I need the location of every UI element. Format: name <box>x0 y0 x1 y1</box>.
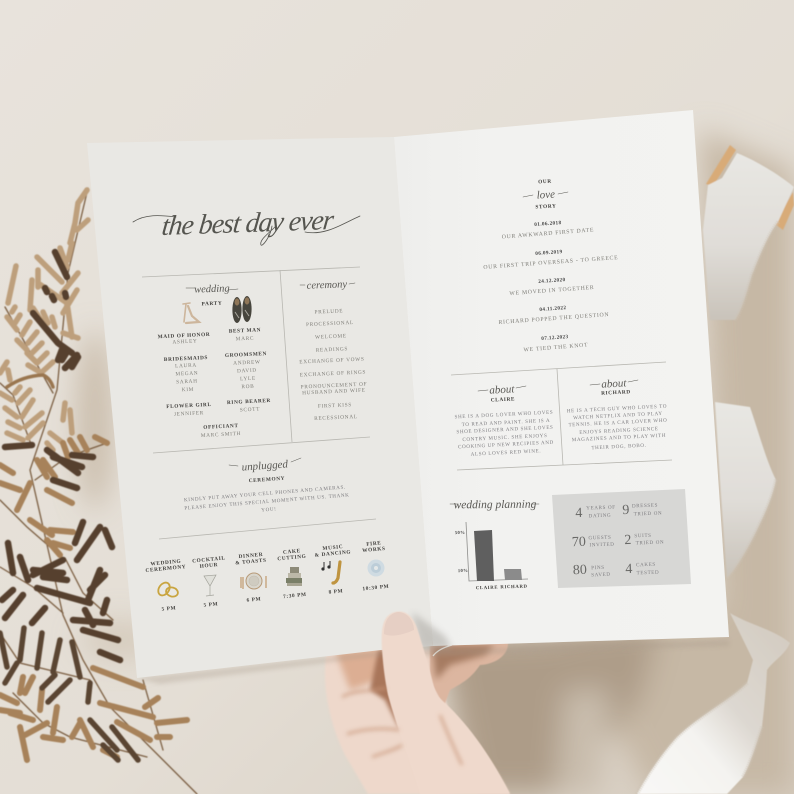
hand: thumb over the paper <box>342 612 510 794</box>
timeline: music and dancing: & DANCING <box>314 549 351 559</box>
timeline: wedding ceremony: CERERMONY <box>145 564 187 574</box>
stats panel <box>552 489 691 588</box>
icon: cake <box>286 567 302 586</box>
icon: men's shoes <box>232 296 252 323</box>
claire bio <box>454 410 554 458</box>
wedding party names: MARC <box>236 336 254 342</box>
stat: pins saved <box>573 563 611 578</box>
crevice beside thumb <box>370 650 400 730</box>
chart labels: CLAIRE <box>476 586 498 591</box>
ceremony order list: EXCHANGE OF VOWS <box>299 357 365 365</box>
timeline: wedding ceremony <box>145 559 187 613</box>
wedding party names: RING BEARER <box>227 398 271 406</box>
love story timeline: 06.09.2019 <box>535 249 563 257</box>
timeline: cocktail hour: 5 PM <box>203 601 219 609</box>
bar chart <box>455 522 528 591</box>
stat: dresses tried on: TRIED ON <box>634 511 662 517</box>
unplugged note: YOU! <box>261 506 277 514</box>
hand: palm and fingers behind the paper <box>325 642 510 794</box>
love story timeline: WE TIED THE KNOT <box>523 342 589 354</box>
love story timeline: 01.06.2018 <box>534 220 562 228</box>
wedding party names: JENNIFER <box>174 410 204 418</box>
timeline: cake cutting: CAKE <box>283 548 301 556</box>
timeline: cocktail hour: HOUR <box>199 562 218 570</box>
timeline: wedding ceremony: 5 PM <box>161 605 177 613</box>
wedding party names: ANDREW <box>233 359 261 367</box>
stat: guests invited: INVITED <box>589 542 615 548</box>
timeline: dinner and toasts: & TOASTS <box>235 558 267 566</box>
timeline: cake cutting: CUTTING <box>277 554 307 562</box>
ceremony order list: RECESSIONAL <box>314 414 358 422</box>
ceremony order list: EXCHANGE OF RINGS <box>300 369 366 379</box>
wedding party names: ASHLEY <box>172 338 198 346</box>
timeline: fire works: WORKS <box>362 546 386 554</box>
heading: about richard: RICHARD <box>601 389 631 397</box>
stat: guests invited: GUESTS <box>588 535 612 541</box>
heading: wedding planning: wedding planning <box>454 499 537 511</box>
timeline: dinner and toasts: 6 PM <box>246 596 262 604</box>
claire bio: ALSO LOVES RED WINE. <box>471 448 541 458</box>
section: wedding planning <box>450 489 691 591</box>
wedding party names: SCOTT <box>240 407 260 413</box>
thumb shadow <box>412 612 452 650</box>
ceremony order list <box>299 308 367 422</box>
heading: about richard <box>590 377 638 397</box>
section: day timeline <box>145 540 390 613</box>
curved tan stalk <box>7 375 53 387</box>
stat: cakes tested <box>625 562 659 577</box>
pale tan leaflets <box>0 190 88 450</box>
unplugged note: KINDLY PUT AWAY YOUR CELL PHONES AND CAMERAS. <box>184 485 346 504</box>
icon: sandal <box>183 303 199 323</box>
love story timeline: OUR FIRST TRIP OVERSEAS - TO GREECE <box>483 255 619 271</box>
heading: about claire: about <box>489 383 516 397</box>
chart labels: RICHARD <box>500 585 528 590</box>
chart axes <box>466 522 528 581</box>
timeline: cake cutting: 7:30 PM <box>283 592 307 600</box>
wedding party names: SARAH <box>176 379 198 385</box>
about section rules <box>451 362 672 470</box>
wedding party names: MARC SMITH <box>201 431 241 439</box>
dark brown leaflets <box>2 252 120 660</box>
ceremony order list: PRELUDE <box>314 308 343 316</box>
stat: years of dating: 4 <box>575 506 583 521</box>
section: unplugged ceremony <box>184 458 350 514</box>
stat: cakes tested: 4 <box>625 562 633 577</box>
mid brown leaflets <box>0 437 187 760</box>
finger shading <box>432 645 495 680</box>
stat: years of dating <box>575 504 616 521</box>
timeline: music and dancing: MUSIC <box>322 544 344 552</box>
chart labels: 10% <box>458 568 468 573</box>
claire bio: COOKING UP NEW RECIPIES AND <box>458 440 554 450</box>
heading: our love story: love <box>536 189 555 201</box>
stat: pins saved: 80 <box>573 563 587 578</box>
stats panel background <box>552 489 691 588</box>
stat: suits tried on <box>624 533 664 548</box>
left page <box>87 137 433 678</box>
timeline: cocktail hour: COCKTAIL <box>192 555 226 565</box>
claire bio: SHOE DESIGNER AND SHE LOVES <box>456 425 554 435</box>
about claire <box>454 383 554 458</box>
section: wedding party <box>158 283 271 439</box>
love story timeline: RICHARD POPPED THE QUESTION <box>498 312 610 326</box>
love story timeline: 07.12.2023 <box>541 334 569 342</box>
heading: about richard: about <box>601 377 628 391</box>
stat: years of dating: YEARS OF <box>586 504 616 512</box>
wedding party names: DAVID <box>237 368 257 374</box>
fern: dried branches <box>0 188 197 794</box>
wedding party names: KIM <box>182 387 194 393</box>
timeline: dinner and toasts: DINNER <box>238 552 263 560</box>
stat: suits tried on: TRIED ON <box>636 540 664 546</box>
wedding party names: MEGAN <box>175 370 199 378</box>
right page paper <box>394 110 729 646</box>
fern stems <box>0 188 197 794</box>
claire bio: TO READ AND PAINT. SHE IS A <box>462 418 550 428</box>
heading: our love story: STORY <box>535 203 557 211</box>
heading: our love story <box>523 179 568 211</box>
wedding party names: GROOMSMEN <box>225 351 267 359</box>
ribbon: middle <box>715 402 776 578</box>
wedding party names: BEST MAN <box>229 327 261 335</box>
claire bio: CONTRY MUSIC. SHE ENJOYS <box>462 433 548 443</box>
wedding party names: OFFICIANT <box>203 423 239 431</box>
bar: claire <box>474 530 494 581</box>
knuckle and palm creases <box>342 688 462 765</box>
richard bio: TENNIS. HE IS A CAR LOVER WHO <box>568 418 668 428</box>
title: the best day ever: the best day ever <box>160 205 337 242</box>
richard bio: ENJOYS READING SCIENCE <box>579 426 659 436</box>
timeline: fire works: 10:30 PM <box>362 584 390 592</box>
timeline: dinner and toasts <box>235 552 267 604</box>
timeline: cocktail hour <box>192 555 226 609</box>
richard bio: HE IS A TECH GUY WHO LOVES TO <box>567 404 667 414</box>
shadow area right of the pages <box>77 130 794 794</box>
timeline: fire works: FIRE <box>366 540 382 548</box>
timeline: music and dancing: 8 PM <box>328 588 344 596</box>
bar: richard <box>504 569 522 580</box>
heading: ceremony: ceremony <box>307 279 348 292</box>
heading: unplugged ceremony: CEREMONY <box>249 476 285 484</box>
love story timeline <box>483 220 619 354</box>
stat: cakes tested: TESTED <box>637 570 659 576</box>
love story timeline: 04.11.2022 <box>539 305 567 313</box>
stat: dresses tried on: 9 <box>622 503 630 518</box>
thumb nail <box>384 612 414 636</box>
right page <box>394 110 729 646</box>
stat: dresses tried on <box>622 503 662 518</box>
ring <box>433 645 452 656</box>
icon: saxophone with notes <box>321 561 340 583</box>
stat: suits tried on: SUITS <box>634 533 652 539</box>
wedding party names: LAURA <box>175 363 197 369</box>
ceremony order list: WELCOME <box>315 333 347 341</box>
stat: guests invited: 70 <box>572 535 586 550</box>
heading: unplugged ceremony <box>229 458 301 484</box>
stat: guests invited <box>572 535 615 550</box>
wedding party names: ROB <box>241 384 255 390</box>
heading: wedding party: wedding <box>194 283 230 296</box>
unplugged note: PLEASE ENJOY THIS SPECIAL MOMENT WITH US. THANK <box>184 492 350 512</box>
love story timeline: WE MOVED IN TOGETHER <box>509 285 595 297</box>
ribbon: top <box>703 145 794 320</box>
ceremony order list: FIRST KISS <box>318 402 352 410</box>
ceremony order list: READINGS <box>316 346 348 354</box>
left page paper <box>87 137 433 678</box>
ribbon: bottom <box>637 613 790 794</box>
finger behind page <box>430 642 508 706</box>
chart labels <box>455 530 528 591</box>
index finger shading <box>335 648 382 690</box>
richard bio <box>567 404 668 451</box>
icon: gold rings <box>156 580 179 598</box>
stat: cakes tested: CAKES <box>636 562 656 568</box>
timeline: music and dancing <box>314 544 351 596</box>
icon: firework <box>368 560 384 576</box>
wedding party names: FLOWER GIRL <box>166 402 212 410</box>
chart labels: 50% <box>455 530 465 535</box>
heading: about claire: CLAIRE <box>491 396 515 404</box>
ceremony order list: PROCESSIONAL <box>306 320 354 328</box>
shadow beneath the open pages <box>137 640 729 684</box>
richard bio: THEIR DOG, BOBO. <box>591 443 647 451</box>
love story timeline: OUR AWKWARD FIRST DATE <box>502 227 594 241</box>
heading: wedding party <box>186 283 238 307</box>
heading: unplugged ceremony: unplugged <box>241 458 289 474</box>
table rules <box>142 267 376 539</box>
wedding party names: LYLE <box>240 376 256 382</box>
timeline: cake cutting <box>277 548 307 600</box>
claire bio: SHE IS A DOG LOVER WHO LOVES <box>454 410 553 420</box>
wedding party names: BRIDESMAIDS <box>164 355 208 363</box>
stat: years of dating: DATING <box>589 513 611 519</box>
heading: our love story: OUR <box>538 179 552 185</box>
unplugged note <box>184 485 350 514</box>
richard bio: MAGAZINES AND TO PLAY WITH <box>572 433 666 443</box>
richard bio: WATCH NETFLIX AND TO PLAY <box>573 411 663 421</box>
thumb <box>382 612 510 794</box>
stat: pins saved: PINS <box>591 565 605 571</box>
heading: about claire <box>478 383 526 404</box>
ceremony order list: PRONOUNCEMENT OF <box>301 381 367 391</box>
stat: dresses tried on: DRESSES <box>632 503 658 509</box>
wedding party names: MAID OF HONOR <box>158 332 210 340</box>
icon: plate setting <box>241 573 266 589</box>
icon: martini glass <box>204 575 216 596</box>
timeline: wedding ceremony: WEDDING <box>150 559 182 567</box>
stat: suits tried on: 2 <box>624 533 632 548</box>
section: ceremony order <box>299 279 367 422</box>
heading: wedding party: PARTY <box>201 301 222 307</box>
about richard <box>567 377 668 451</box>
wedding party names <box>158 327 271 439</box>
love story timeline: 24.12.2020 <box>538 277 566 285</box>
ceremony order list: HUSBAND AND WIFE <box>302 388 366 396</box>
timeline: fire works <box>362 540 390 592</box>
palm <box>325 650 510 794</box>
stat: pins saved: SAVED <box>591 572 611 578</box>
